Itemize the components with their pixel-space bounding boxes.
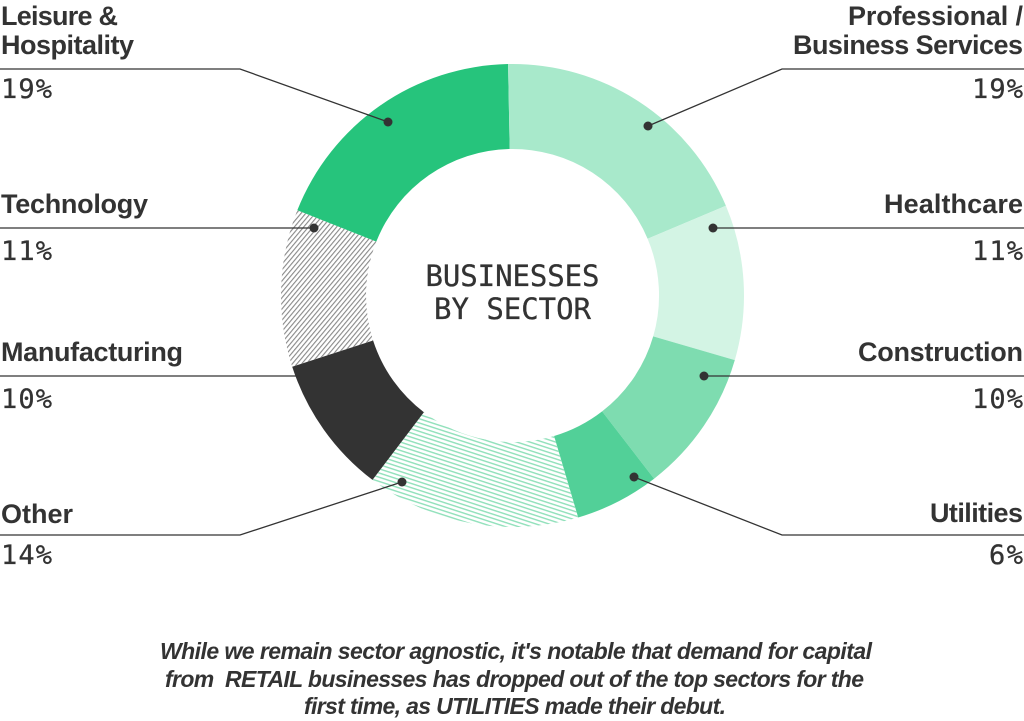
callout: Utilities 6%: Utilities xyxy=(930,498,1023,528)
callout: Other 14%: Other xyxy=(1,499,73,529)
caption: first time, as UTILITIES made their debut. xyxy=(304,693,726,719)
caption: While we remain sector agnostic, it's notable that demand for capital xyxy=(160,638,873,664)
caption: from RETAIL businesses has dropped out of the top sectors for the xyxy=(165,666,864,692)
callout: Manufacturing 10% xyxy=(0,337,300,415)
callout: Manufacturing 10%: 10% xyxy=(1,384,52,415)
callout: Healthcare 11%: 11% xyxy=(972,236,1023,267)
callout: Other 14%: 14% xyxy=(1,540,52,571)
callout: Utilities 6%: 6% xyxy=(989,540,1023,571)
callout: Construction 10% xyxy=(700,337,1024,415)
segment: Technology xyxy=(281,210,376,367)
callout: Construction 10%: 10% xyxy=(972,384,1023,415)
callout: Healthcare 11%: Healthcare xyxy=(884,189,1023,219)
segment: Leisure & Hospitality xyxy=(297,64,510,242)
chart title: BUSINESSES xyxy=(426,259,600,293)
callout: Leisure & Hospitality 19%: 19% xyxy=(1,74,52,105)
callout: Technology 11%: 11% xyxy=(1,236,52,267)
callout: Leisure & Hospitality 19%: Hospitality xyxy=(1,30,134,60)
segment: Healthcare xyxy=(648,206,744,360)
caption xyxy=(160,638,873,719)
callout: Other 14% xyxy=(0,478,406,571)
segment: Manufacturing xyxy=(292,340,424,480)
donut chart xyxy=(281,64,744,527)
segment: Utilities xyxy=(554,411,654,518)
segment: Construction xyxy=(602,336,735,479)
callout: Professional / Business Services 19%: Professional / xyxy=(848,1,1023,31)
callout: Technology 11% xyxy=(0,189,318,267)
callout: Professional / Business Services 19% xyxy=(644,1,1024,130)
callout: Leisure & Hospitality 19% xyxy=(0,1,392,126)
chart title: BY SECTOR xyxy=(434,292,592,326)
callout: Leisure & Hospitality 19%: Leisure & xyxy=(1,1,118,31)
chart title xyxy=(426,259,600,326)
segment: Other xyxy=(372,412,578,527)
callout: Technology 11%: Technology xyxy=(1,189,148,219)
callout: Healthcare 11% xyxy=(708,189,1024,267)
callout: Professional / Business Services 19%: 19% xyxy=(972,74,1023,105)
callout: Utilities 6% xyxy=(630,472,1024,571)
callout: Construction 10%: Construction xyxy=(858,337,1023,367)
callout: Professional / Business Services 19%: Business Services xyxy=(793,30,1023,60)
segment: Professional / Business Services xyxy=(508,64,726,239)
callout: Manufacturing 10%: Manufacturing xyxy=(1,337,183,367)
